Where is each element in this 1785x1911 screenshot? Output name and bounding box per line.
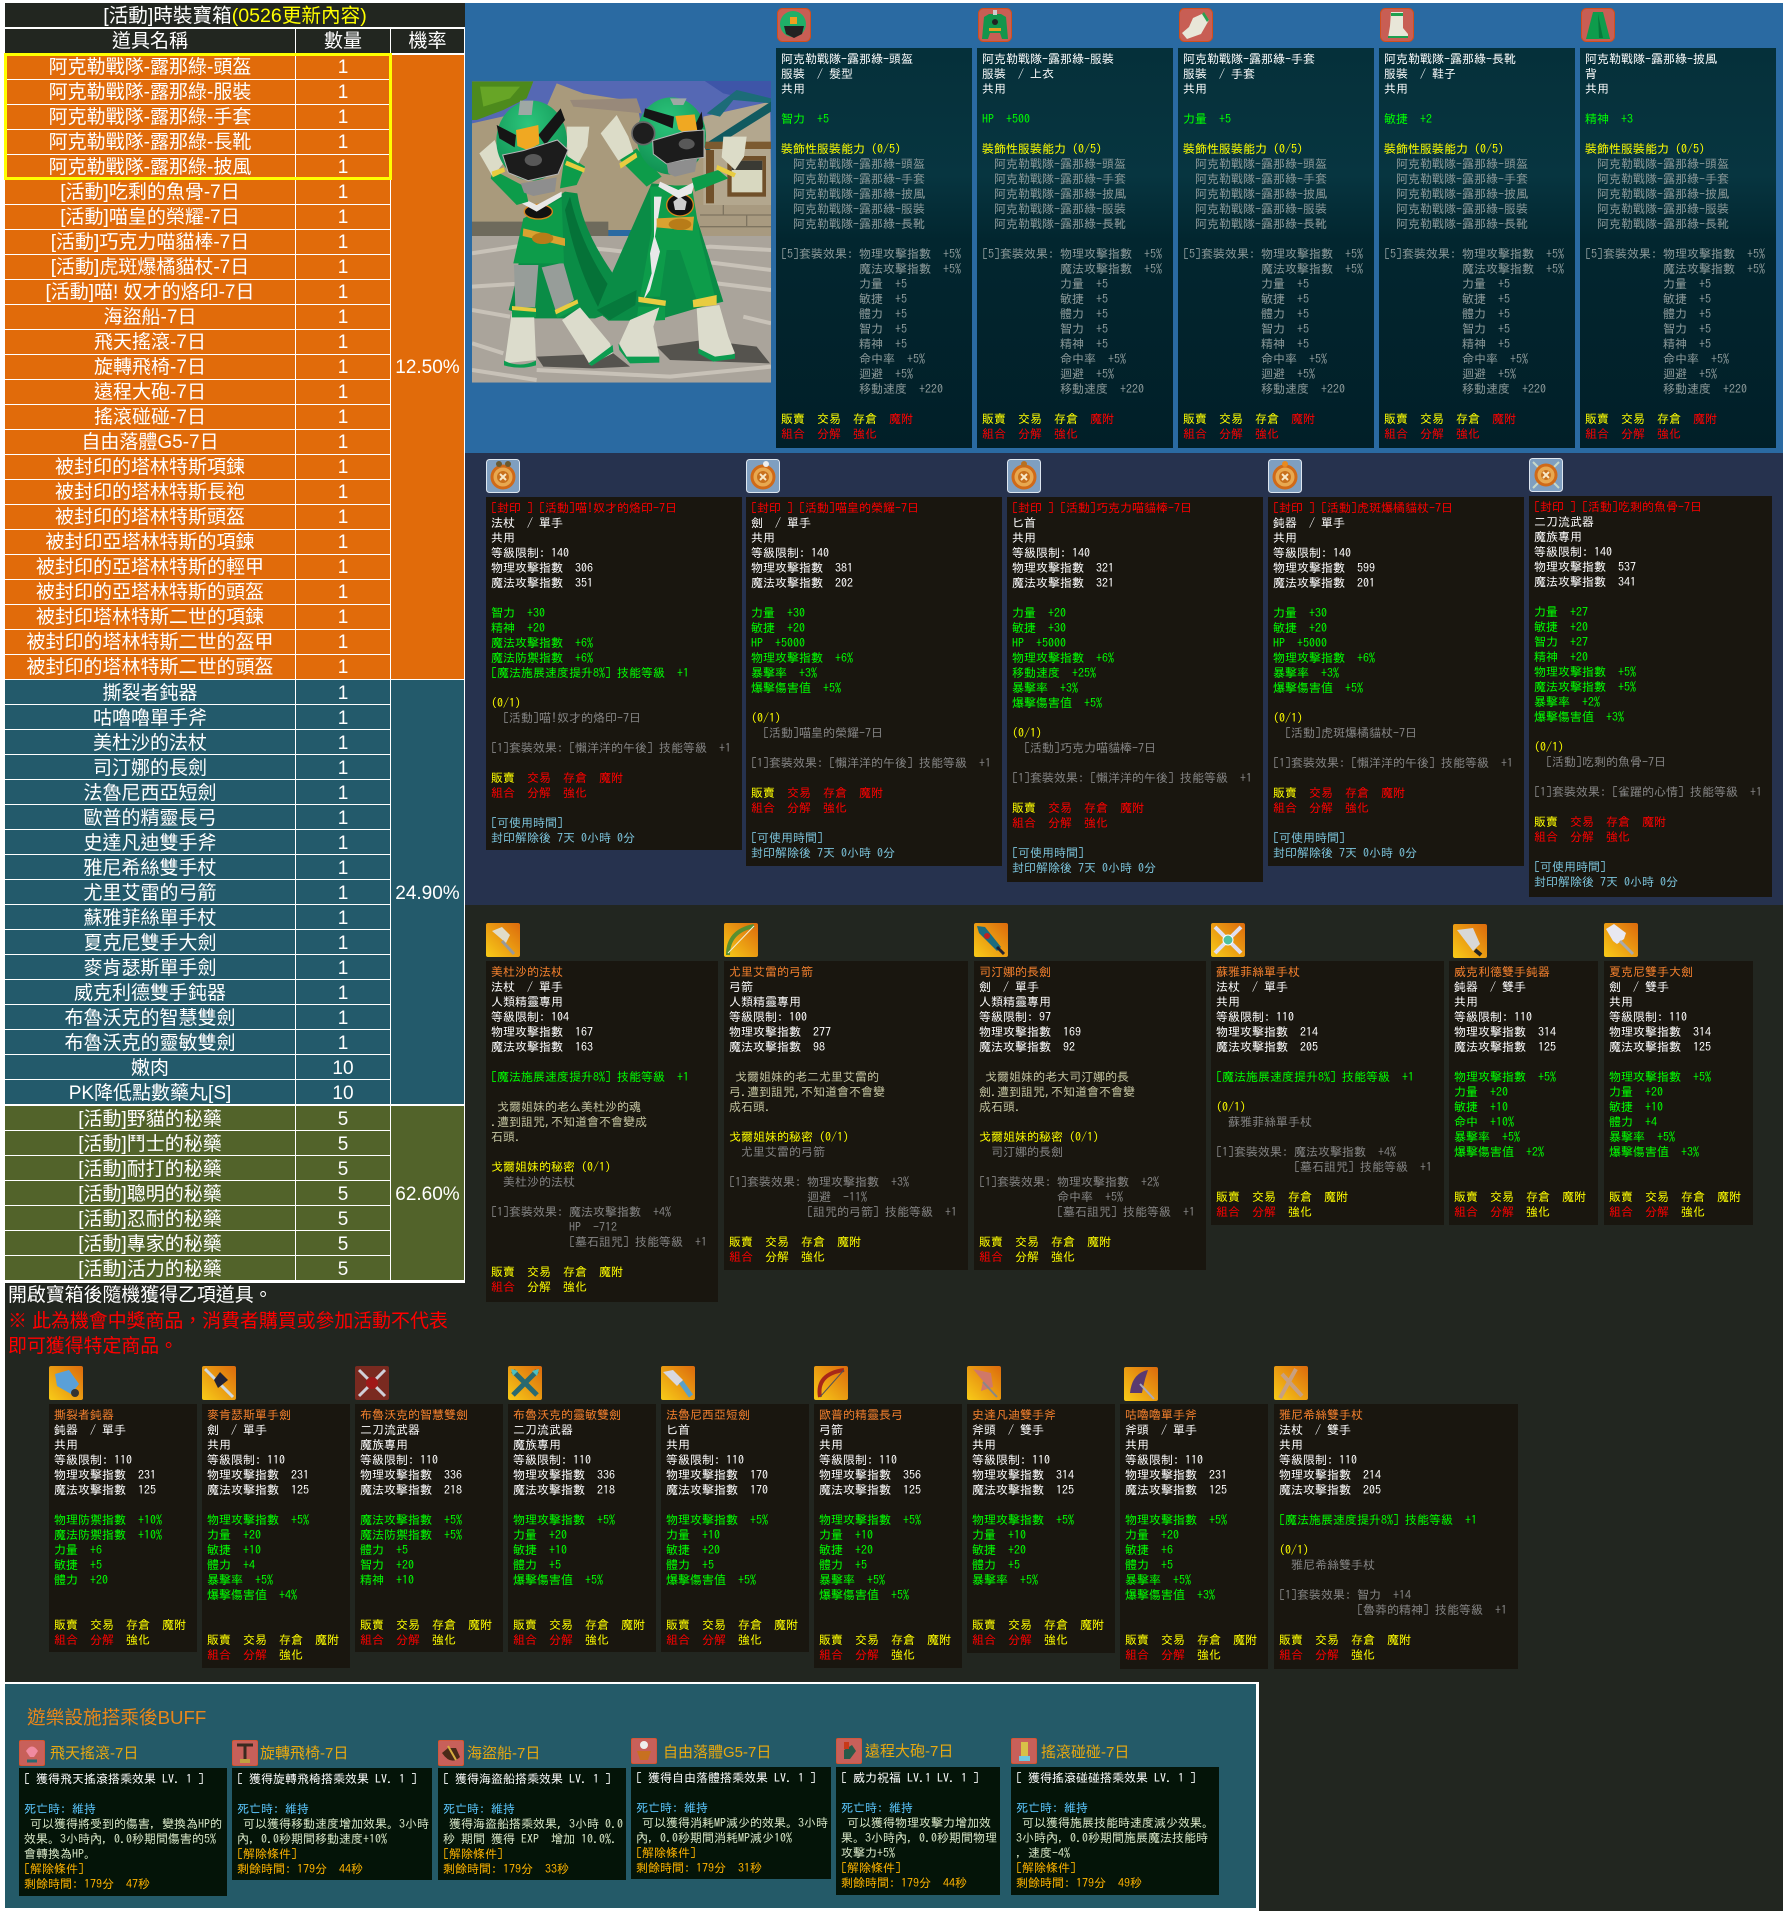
section: teal rows 24.90%: 10 <box>332 1083 354 1104</box>
section: orange rows 12.50%: 被封印的塔林特斯二世的頭盔 <box>26 657 274 678</box>
section: orange rows 12.50%: 阿克勒戰隊-露那綠-長靴 <box>49 132 251 153</box>
section: teal rows 24.90%: 嫩肉 <box>131 1058 169 1079</box>
card: pirate ship buff: [ 獲得海盜船搭乘效果 LV. 1 ] 死亡時: 維持 獲得海盜船搭乘效果, 3小時 0.0 秒 期間 獲得 EXP 增加 10.0%. [解除條件] 剩餘時間: 179分 33秒 <box>443 1773 623 1875</box>
section: olive rows 62.60%: [活動]活力的秘藥 <box>78 1259 222 1280</box>
icon: glove <box>1179 8 1213 42</box>
table title <box>5 3 465 27</box>
section: orange rows 12.50%: 1 <box>338 382 348 403</box>
card: soyafis wand: 蘇雅菲絲單手杖 法杖 / 單手 共用 等級限制: 110 物理攻擊指數 214 魔法攻擊指數 205 [魔法施展速度提升8%] 技能等級 +1 (0/1) 蘇雅菲絲單手杖 [1]套裝效果: 魔法攻擊指數 +4% [墓石詛咒] 技能等級 +1 販賣 交易 存倉 魔附 組合 分解 強化 <box>1216 966 1432 1218</box>
table header: quantity <box>296 29 390 53</box>
section: orange rows 12.50%: 1 <box>338 632 348 653</box>
section: orange rows 12.50%: 飛天搖滾-7日 <box>94 332 206 353</box>
yellow highlight box <box>4 53 392 180</box>
section: orange rows 12.50%: 1 <box>338 407 348 428</box>
heading: ride buffs: 遊樂設施搭乘後BUFF <box>27 1707 206 1728</box>
card: ripper mace: 撕裂者鈍器 鈍器 / 單手 共用 等級限制: 110 物理攻擊指數 231 魔法攻擊指數 125 物理防禦指數 +10% 魔法防禦指數 +10% 力量 +6 敏捷 +5 體力 +20 販賣 交易 存倉 魔附 組合 分解 強化 <box>54 1409 186 1646</box>
section: teal rows 24.90%: 尤里艾雷的弓箭 <box>83 883 216 904</box>
card: macsus sword: 麥肯瑟斯單手劍 劍 / 單手 共用 等級限制: 110 物理攻擊指數 231 魔法攻擊指數 125 物理攻擊指數 +5% 力量 +20 敏捷 +10 體力 +4 暴擊率 +5% 爆擊傷害值 +4% 販賣 交易 存倉 魔附 組合 分解 強化 <box>207 1409 339 1661</box>
icon: stavandi axe <box>967 1366 1001 1400</box>
section: orange rows 12.50%: 遠程大砲-7日 <box>94 382 206 403</box>
section: orange rows 12.50%: 被封印的塔林特斯二世的盔甲 <box>26 632 274 653</box>
section: teal rows 24.90%: 1 <box>338 758 348 779</box>
icon: boot <box>1380 8 1414 42</box>
probability 62.60%: 62.60% <box>395 1184 460 1205</box>
card: shaknir sword: 夏克尼雙手大劍 劍 / 雙手 共用 等級限制: 110 物理攻擊指數 314 魔法攻擊指數 125 物理攻擊指數 +5% 力量 +20 敏捷 +10 體力 +4 暴擊率 +5% 爆擊傷害值 +3% 販賣 交易 存倉 魔附 組合 分解 強化 <box>1609 966 1741 1218</box>
section: teal rows 24.90%: 1 <box>338 908 348 929</box>
section: olive rows 62.60% <box>5 1106 464 1280</box>
section: orange rows 12.50%: 1 <box>338 57 348 78</box>
section: orange rows 12.50%: 1 <box>338 557 348 578</box>
icon: agile dual swords <box>508 1366 542 1400</box>
section: olive rows 62.60%: 5 <box>338 1209 348 1230</box>
section: teal rows 24.90% <box>5 680 464 1104</box>
section: orange rows 12.50%: 被封印亞塔林特斯的項鍊 <box>45 532 254 553</box>
card: gollum axe: 咕嚕嚕單手斧 斧頭 / 單手 共用 等級限制: 110 物理攻擊指數 231 魔法攻擊指數 125 物理攻擊指數 +5% 力量 +20 敏捷 +6 體力 +5 暴擊率 +5% 爆擊傷害值 +3% 販賣 交易 存倉 魔附 組合 分解 強化 <box>1125 1409 1257 1661</box>
section: orange rows 12.50%: 1 <box>338 82 348 103</box>
section: teal rows 24.90%: 威克利德雙手鈍器 <box>74 983 226 1004</box>
section: teal rows 24.90%: 撕裂者鈍器 <box>102 683 198 704</box>
section: orange rows 12.50%: 海盜船-7日 <box>104 307 196 328</box>
icon: farnesia dagger <box>661 1366 695 1400</box>
note: red disclaimer: 即可獲得特定商品。 <box>8 1336 178 1357</box>
section: teal rows 24.90%: 蘇雅菲絲單手杖 <box>83 908 216 929</box>
section: orange rows 12.50%: 1 <box>338 507 348 528</box>
section: orange rows 12.50%: 阿克勒戰隊-露那綠-服裝 <box>49 82 251 103</box>
section: olive rows 62.60%: 5 <box>338 1234 348 1255</box>
section: teal rows 24.90%: 1 <box>338 1033 348 1054</box>
section: orange rows 12.50%: [活動]喵皇的榮耀-7日 <box>60 207 240 228</box>
probability 12.50%: 12.50% <box>395 357 460 378</box>
section: olive rows 62.60%: [活動]專家的秘藥 <box>78 1234 222 1255</box>
card: sealed fish bone: [封印 ] [活動]吃剩的魚骨-7日 二刀流武器 魔族專用 等級限制: 140 物理攻擊指數 537 魔法攻擊指數 341 力量 +27 敏捷 +20 智力 +27 精神 +20 物理攻擊指數 +5% 魔法攻擊指數 +5% 暴擊率 +2% 爆擊傷害值 +3% (0/1) [活動]吃剩的魚骨-7日 [1]套裝效果: [雀躍的心情] 技能等級 +1 販賣 交易 存倉 魔附 組合 分解 強化 [可使用時間] 封印解除後 7天 0小時 0分 <box>1534 501 1762 888</box>
section: teal rows 24.90%: 雅尼希絲雙手杖 <box>83 858 216 879</box>
section: teal rows 24.90%: 美杜沙的法杖 <box>93 733 207 754</box>
section: teal rows 24.90%: 1 <box>338 933 348 954</box>
table title: [活動]時裝寶箱(0526更新內容) <box>103 5 367 27</box>
note: red disclaimer: ※ 此為機會中獎商品，消費者購買或參加活動不代表 <box>8 1311 448 1332</box>
card: cannon buff: [ 威力祝福 LV.1 LV. 1 ] 死亡時: 維持 可以獲得物理攻擊力增加效 果。3小時內，0.0秒期間物理 攻擊力+5% [解除條件] 剩餘時間: 179分 44秒 <box>841 1772 997 1889</box>
section: teal rows 24.90%: 咕嚕嚕單手斧 <box>93 708 207 729</box>
icon: pirate ship <box>438 1740 464 1766</box>
left ranger <box>508 192 612 318</box>
section: orange rows 12.50%: [活動]吃剩的魚骨-7日 <box>60 182 240 203</box>
card: oper bow: 歐普的精靈長弓 弓箭 共用 等級限制: 110 物理攻擊指數 356 魔法攻擊指數 125 物理攻擊指數 +5% 力量 +10 敏捷 +20 體力 +5 暴擊率 +5% 爆擊傷害值 +5% 販賣 交易 存倉 魔附 組合 分解 強化 <box>819 1409 951 1661</box>
icon: cannon <box>836 1738 862 1764</box>
icon: suit <box>978 8 1012 42</box>
card: sealed glory: [封印 ] [活動]喵皇的榮耀-7日 劍 / 單手 共用 等級限制: 140 物理攻擊指數 381 魔法攻擊指數 202 力量 +30 敏捷 +20 HP +5000 物理攻擊指數 +6% 暴擊率 +3% 爆擊傷害值 +5% (0/1) [活動]喵皇的榮耀-7日 [1]套裝效果: [懶洋洋的午後] 技能等級 +1 販賣 交易 存倉 魔附 組合 分解 強化 [可使用時間] 封印解除後 7天 0小時 0分 <box>751 502 991 859</box>
section: orange rows 12.50%: 搖滾碰碰-7日 <box>94 407 206 428</box>
section: teal rows 24.90%: 1 <box>338 958 348 979</box>
section: orange rows 12.50%: 被封印的塔林特斯頭盔 <box>55 507 245 528</box>
icon: ripper mace <box>49 1366 83 1400</box>
table header: item name <box>5 29 295 53</box>
card: rock bumper buff: [ 獲得搖滾碰碰搭乘效果 LV. 1 ] 死亡時: 維持 可以獲得施展技能時速度減少效果。 3小時內，0.0秒期間施展魔法技能時 ，速度-4% [解除條件] 剩餘時間: 179分 49秒 <box>1016 1772 1214 1889</box>
section: teal rows 24.90%: 1 <box>338 858 348 879</box>
prize table <box>5 3 465 1283</box>
icon: shaknir sword <box>1604 923 1638 957</box>
title: rock bumper: 搖滾碰碰-7日 <box>1041 1744 1129 1761</box>
section: olive rows 62.60%: 5 <box>338 1134 348 1155</box>
table header: quantity: 數量 <box>324 31 362 52</box>
section: teal rows 24.90%: 1 <box>338 683 348 704</box>
section: orange rows 12.50%: 1 <box>338 332 348 353</box>
note: random item: 開啟寶箱後隨機獲得乙項道具。 <box>8 1285 272 1306</box>
section: olive rows 62.60%: 5 <box>338 1109 348 1130</box>
section: orange rows 12.50%: 阿克勒戰隊-露那綠-披風 <box>49 157 251 178</box>
card: swing chair buff: [ 獲得旋轉飛椅搭乘效果 LV. 1 ] 死亡時: 維持 可以獲得移動速度增加效果。3小時 內，0.0秒期間移動速度+10% [解除條件] 剩餘時間: 179分 44秒 <box>237 1773 429 1875</box>
title: cannon: 遠程大砲-7日 <box>865 1743 953 1760</box>
section: orange rows 12.50%: 1 <box>338 157 348 178</box>
section: orange rows 12.50%: 被封印塔林特斯二世的項鍊 <box>36 607 264 628</box>
card: agile dual swords: 布魯沃克的靈敏雙劍 二刀流武器 魔族專用 等級限制: 110 物理攻擊指數 336 魔法攻擊指數 218 物理攻擊指數 +5% 力量 +20 敏捷 +10 體力 +5 爆擊傷害值 +5% 販賣 交易 存倉 魔附 組合 分解 強化 <box>513 1409 645 1646</box>
title: free fall: 自由落體G5-7日 <box>663 1744 771 1761</box>
title: pirate ship: 海盜船-7日 <box>467 1745 540 1762</box>
section: olive rows 62.60%: 5 <box>338 1159 348 1180</box>
section: orange rows 12.50%: [活動]巧克力喵貓棒-7日 <box>51 232 249 253</box>
card: wickrid mace: 威克利德雙手鈍器 鈍器 / 雙手 共用 等級限制: 110 物理攻擊指數 314 魔法攻擊指數 125 物理攻擊指數 +5% 力量 +20 敏捷 +10 命中 +10% 暴擊率 +5% 爆擊傷害值 +2% 販賣 交易 存倉 魔附 組合 分解 強化 <box>1454 966 1586 1218</box>
icon: gollum axe <box>1124 1367 1158 1401</box>
card: farnesia dagger: 法魯尼西亞短劍 匕首 共用 等級限制: 110 物理攻擊指數 170 魔法攻擊指數 170 物理攻擊指數 +5% 力量 +10 敏捷 +20 體力 +5 爆擊傷害值 +5% 販賣 交易 存倉 魔附 組合 分解 強化 <box>666 1409 798 1646</box>
section: orange rows 12.50%: 旋轉飛椅-7日 <box>94 357 206 378</box>
icon: soyafis wand <box>1211 923 1245 957</box>
icon: macsus sword <box>202 1366 236 1400</box>
icon: yanis staff <box>1274 1366 1308 1400</box>
section: teal rows 24.90%: 布魯沃克的靈敏雙劍 <box>64 1033 236 1054</box>
note: red disclaimer <box>8 1311 448 1357</box>
right ranger <box>597 183 723 321</box>
section: teal rows 24.90%: 1 <box>338 1008 348 1029</box>
table header: probability <box>391 29 464 53</box>
card: sealed cat stick: [封印 ] [活動]巧克力喵貓棒-7日 匕首 共用 等級限制: 140 物理攻擊指數 321 魔法攻擊指數 321 力量 +20 敏捷 +30 HP +5000 物理攻擊指數 +6% 移動速度 +25% 暴擊率 +3% 爆擊傷害值 +5% (0/1) [活動]巧克力喵貓棒-7日 [1]套裝效果: [懶洋洋的午後] 技能等級 +1 販賣 交易 存倉 魔附 組合 分解 強化 [可使用時間] 封印解除後 7天 0小時 0分 <box>1012 502 1252 874</box>
card: free fall buff: [ 獲得自由落體搭乘效果 LV. 1 ] 死亡時: 維持 可以獲得消耗MP減少的效果。3小時 內，0.0秒期間消耗MP減少10% [解除條件] 剩餘時間: 179分 31秒 <box>636 1772 828 1874</box>
card: sealed brand: [封印 ] [活動]喵!奴才的烙印-7日 法杖 / 單手 共用 等級限制: 140 物理攻擊指數 306 魔法攻擊指數 351 智力 +30 精神 +20 魔法攻擊指數 +6% 魔法防禦指數 +6% [魔法施展速度提升8%] 技能等級 +1 (0/1) [活動]喵!奴才的烙印-7日 [1]套裝效果: [懶洋洋的午後] 技能等級 +1 販賣 交易 存倉 魔附 組合 分解 強化 [可使用時間] 封印解除後 7天 0小時 0分 <box>491 502 731 844</box>
section: orange rows 12.50%: 1 <box>338 357 348 378</box>
section: orange rows 12.50%: 被封印的亞塔林特斯的頭盔 <box>36 582 264 603</box>
section: teal rows 24.90%: 布魯沃克的智慧雙劍 <box>64 1008 236 1029</box>
section: teal rows 24.90%: 法魯尼西亞短劍 <box>83 783 216 804</box>
probability 62.60% <box>391 1106 464 1280</box>
section: olive rows 62.60%: [活動]耐打的秘藥 <box>78 1159 222 1180</box>
card: flying rock buff: [ 獲得飛天搖滾搭乘效果 LV. 1 ] 死亡時: 維持 可以獲得將受到的傷害，變換為HP的 效果。3小時內，0.0秒期間傷害的5% 會轉換為HP。 [解除條件] 剩餘時間: 179分 47秒 <box>24 1773 222 1890</box>
icon: eurial bow <box>724 923 758 957</box>
table header: probability: 機率 <box>408 31 446 52</box>
section: teal rows 24.90%: 史達凡迪雙手斧 <box>83 833 216 854</box>
card: eurial bow: 尤里艾雷的弓箭 弓箭 人類精靈專用 等級限制: 100 物理攻擊指數 277 魔法攻擊指數 98 戈爾姐妹的老二尤里艾雷的 弓.遭到詛咒,不知道會不會變 成石頭. 戈爾姐妹的秘密 (0/1) 尤里艾雷的弓箭 [1]套裝效果: 物理攻擊指數 +3% 迴避 -11% [詛咒的弓箭] 技能等級 +1 販賣 交易 存倉 魔附 組合 分解 強化 <box>729 966 957 1263</box>
icon: stheno sword <box>974 923 1008 957</box>
section: olive rows 62.60%: [活動]忍耐的秘藥 <box>78 1209 222 1230</box>
section: olive rows 62.60%: [活動]鬥士的秘藥 <box>78 1134 222 1155</box>
section: teal rows 24.90%: 司汀娜的長劍 <box>93 758 207 779</box>
section: teal rows 24.90%: 1 <box>338 808 348 829</box>
icon: oper bow <box>814 1366 848 1400</box>
section: orange rows 12.50%: 被封印的塔林特斯長袍 <box>55 482 245 503</box>
card: gloves: 阿克勒戰隊-露那綠-手套 服裝 / 手套 共用 力量 +5 裝飾性服裝能力 (0/5) 阿克勒戰隊-露那綠-頭盔 阿克勒戰隊-露那綠-手套 阿克勒戰隊-露那綠-披風 阿克勒戰隊-露那綠-服裝 阿克勒戰隊-露那綠-長靴 [5]套裝效果: 物理攻擊指數 +5% 魔法攻擊指數 +5% 力量 +5 敏捷 +5 體力 +5 智力 +5 精神 +5 命中率 +5% 迴避 +5% 移動速度 +220 販賣 交易 存倉 魔附 組合 分解 強化 <box>1183 53 1363 440</box>
icon: free fall <box>631 1738 657 1764</box>
section: orange rows 12.50%: 被封印的塔林特斯項鍊 <box>55 457 245 478</box>
probability 24.90%: 24.90% <box>395 883 460 904</box>
section: teal rows 24.90%: 10 <box>332 1058 354 1079</box>
section: orange rows 12.50%: 1 <box>338 182 348 203</box>
section: teal rows 24.90%: 1 <box>338 983 348 1004</box>
icon: helmet <box>777 8 811 42</box>
icon: wickrid mace <box>1453 924 1487 958</box>
section: olive rows 62.60%: 5 <box>338 1259 348 1280</box>
section: teal rows 24.90%: 夏克尼雙手大劍 <box>83 933 216 954</box>
section: orange rows 12.50%: 1 <box>338 282 348 303</box>
section: orange rows 12.50%: [活動]喵! 奴才的烙印-7日 <box>45 282 254 303</box>
section: orange rows 12.50%: 1 <box>338 232 348 253</box>
card: stavandi axe: 史達凡迪雙手斧 斧頭 / 雙手 共用 等級限制: 110 物理攻擊指數 314 魔法攻擊指數 125 物理攻擊指數 +5% 力量 +10 敏捷 +20 體力 +5 暴擊率 +5% 販賣 交易 存倉 魔附 組合 分解 強化 <box>972 1409 1104 1646</box>
section: orange rows 12.50%: 被封印的亞塔林特斯的輕甲 <box>36 557 264 578</box>
probability 12.50% <box>391 55 464 679</box>
table header: item name: 道具名稱 <box>112 31 188 52</box>
section: teal rows 24.90%: 麥肯瑟斯單手劍 <box>83 958 216 979</box>
section: teal rows 24.90%: 1 <box>338 883 348 904</box>
section: teal rows 24.90%: 1 <box>338 733 348 754</box>
section: olive rows 62.60%: [活動]野貓的秘藥 <box>78 1109 222 1130</box>
card: suit: 阿克勒戰隊-露那綠-服裝 服裝 / 上衣 共用 HP +500 裝飾性服裝能力 (0/5) 阿克勒戰隊-露那綠-頭盔 阿克勒戰隊-露那綠-手套 阿克勒戰隊-露那綠-披風 阿克勒戰隊-露那綠-服裝 阿克勒戰隊-露那綠-長靴 [5]套裝效果: 物理攻擊指數 +5% 魔法攻擊指數 +5% 力量 +5 敏捷 +5 體力 +5 智力 +5 精神 +5 命中率 +5% 迴避 +5% 移動速度 +220 販賣 交易 存倉 魔附 組合 分解 強化 <box>982 53 1162 440</box>
section: orange rows 12.50%: 1 <box>338 582 348 603</box>
card: cape: 阿克勒戰隊-露那綠-披風 背 共用 精神 +3 裝飾性服裝能力 (0/5) 阿克勒戰隊-露那綠-頭盔 阿克勒戰隊-露那綠-手套 阿克勒戰隊-露那綠-披風 阿克勒戰隊-露那綠-服裝 阿克勒戰隊-露那綠-長靴 [5]套裝效果: 物理攻擊指數 +5% 魔法攻擊指數 +5% 力量 +5 敏捷 +5 體力 +5 智力 +5 精神 +5 命中率 +5% 迴避 +5% 移動速度 +220 販賣 交易 存倉 魔附 組合 分解 強化 <box>1585 53 1765 440</box>
section: orange rows 12.50%: 1 <box>338 307 348 328</box>
section: teal rows 24.90%: PK降低點數藥丸[S] <box>69 1083 231 1104</box>
section: orange rows 12.50%: 阿克勒戰隊-露那綠-手套 <box>49 107 251 128</box>
section: olive rows 62.60%: [活動]聰明的秘藥 <box>78 1184 222 1205</box>
section: teal rows 24.90%: 1 <box>338 708 348 729</box>
card: yanis staff: 雅尼希絲雙手杖 法杖 / 雙手 共用 等級限制: 110 物理攻擊指數 214 魔法攻擊指數 205 [魔法施展速度提升8%] 技能等級 +1 (0/1) 雅尼希絲雙手杖 [1]套裝效果: 智力 +14 [魯莽的精神] 技能等級 +1 販賣 交易 存倉 魔附 組合 分解 強化 <box>1279 1409 1507 1661</box>
title: flying rock: 飛天搖滾-7日 <box>50 1745 138 1762</box>
section: olive rows 62.60%: 5 <box>338 1184 348 1205</box>
icon: medusa staff <box>486 923 520 957</box>
section: orange rows 12.50%: 自由落體G5-7日 <box>81 432 219 453</box>
icon: cape <box>1581 8 1615 42</box>
section: orange rows 12.50%: 1 <box>338 482 348 503</box>
icon: rock bumper <box>1011 1738 1037 1764</box>
card: wisdom dual swords: 布魯沃克的智慧雙劍 二刀流武器 魔族專用 等級限制: 110 物理攻擊指數 336 魔法攻擊指數 218 魔法攻擊指數 +5% 魔法防禦指數 +5% 體力 +5 智力 +20 精神 +10 販賣 交易 存倉 魔附 組合 分解 強化 <box>360 1409 492 1646</box>
section: orange rows 12.50%: 1 <box>338 457 348 478</box>
section: orange rows 12.50%: 1 <box>338 132 348 153</box>
section: teal rows 24.90%: 1 <box>338 833 348 854</box>
section: orange rows 12.50%: 1 <box>338 107 348 128</box>
section: orange rows 12.50%: 1 <box>338 657 348 678</box>
card: sealed cat staff: [封印 ] [活動]虎斑爆橘貓杖-7日 鈍器 / 單手 共用 等級限制: 140 物理攻擊指數 599 魔法攻擊指數 201 力量 +30 敏捷 +20 HP +5000 物理攻擊指數 +6% 暴擊率 +3% 爆擊傷害值 +5% (0/1) [活動]虎斑爆橘貓杖-7日 [1]套裝效果: [懶洋洋的午後] 技能等級 +1 販賣 交易 存倉 魔附 組合 分解 強化 [可使用時間] 封印解除後 7天 0小時 0分 <box>1273 502 1513 859</box>
section: orange rows 12.50% <box>5 55 464 679</box>
icon: sealed cat stick <box>1007 459 1041 493</box>
section: orange rows 12.50%: 1 <box>338 532 348 553</box>
icon: sealed cat staff <box>1268 459 1302 493</box>
icon: sealed brand <box>486 459 520 493</box>
section: orange rows 12.50%: 1 <box>338 607 348 628</box>
title: swing chair: 旋轉飛椅-7日 <box>260 1745 348 1762</box>
card: boots: 阿克勒戰隊-露那綠-長靴 服裝 / 鞋子 共用 敏捷 +2 裝飾性服裝能力 (0/5) 阿克勒戰隊-露那綠-頭盔 阿克勒戰隊-露那綠-手套 阿克勒戰隊-露那綠-披風 阿克勒戰隊-露那綠-服裝 阿克勒戰隊-露那綠-長靴 [5]套裝效果: 物理攻擊指數 +5% 魔法攻擊指數 +5% 力量 +5 敏捷 +5 體力 +5 智力 +5 精神 +5 命中率 +5% 迴避 +5% 移動速度 +220 販賣 交易 存倉 魔附 組合 分解 強化 <box>1384 53 1564 440</box>
icon: sealed fish bone <box>1529 458 1563 492</box>
probability 24.90% <box>391 680 464 1104</box>
card: helmet: 阿克勒戰隊-露那綠-頭盔 服裝 / 髮型 共用 智力 +5 裝飾性服裝能力 (0/5) 阿克勒戰隊-露那綠-頭盔 阿克勒戰隊-露那綠-手套 阿克勒戰隊-露那綠-披風 阿克勒戰隊-露那綠-服裝 阿克勒戰隊-露那綠-長靴 [5]套裝效果: 物理攻擊指數 +5% 魔法攻擊指數 +5% 力量 +5 敏捷 +5 體力 +5 智力 +5 精神 +5 命中率 +5% 迴避 +5% 移動速度 +220 販賣 交易 存倉 魔附 組合 分解 強化 <box>781 53 961 440</box>
section: orange rows 12.50%: 1 <box>338 257 348 278</box>
card: stheno sword: 司汀娜的長劍 劍 / 單手 人類精靈專用 等級限制: 97 物理攻擊指數 169 魔法攻擊指數 92 戈爾姐妹的老大司汀娜的長 劍.遭到詛咒,不知道會不會變 成石頭. 戈爾姐妹的秘密 (0/1) 司汀娜的長劍 [1]套裝效果: 物理攻擊指數 +2% 命中率 +5% [墓石詛咒] 技能等級 +1 販賣 交易 存倉 魔附 組合 分解 強化 <box>979 966 1195 1263</box>
icon: swing chair <box>232 1740 258 1766</box>
section: teal rows 24.90%: 1 <box>338 783 348 804</box>
section: orange rows 12.50%: [活動]虎斑爆橘貓杖-7日 <box>51 257 249 278</box>
section: orange rows 12.50%: 1 <box>338 432 348 453</box>
icon: sealed glory <box>746 459 780 493</box>
icon: flying rock <box>19 1740 45 1766</box>
panel: ride buffs <box>0 1682 1259 1911</box>
character image: two green rangers <box>472 81 771 382</box>
section: orange rows 12.50%: 阿克勒戰隊-露那綠-頭盔 <box>49 57 251 78</box>
card: medusa staff: 美杜沙的法杖 法杖 / 單手 人類精靈專用 等級限制: 104 物理攻擊指數 167 魔法攻擊指數 163 [魔法施展速度提升8%] 技能等級 +1 戈爾姐妹的老么美杜沙的魂 .遭到詛咒,不知道會不會變成 石頭. 戈爾姐妹的秘密 (0/1) 美杜沙的法杖 [1]套裝效果: 魔法攻擊指數 +4% HP -712 [墓石詛咒] 技能等級 +1 販賣 交易 存倉 魔附 組合 分解 強化 <box>491 966 707 1293</box>
icon: wisdom dual swords <box>355 1366 389 1400</box>
section: teal rows 24.90%: 歐普的精靈長弓 <box>83 808 216 829</box>
section: orange rows 12.50%: 1 <box>338 207 348 228</box>
